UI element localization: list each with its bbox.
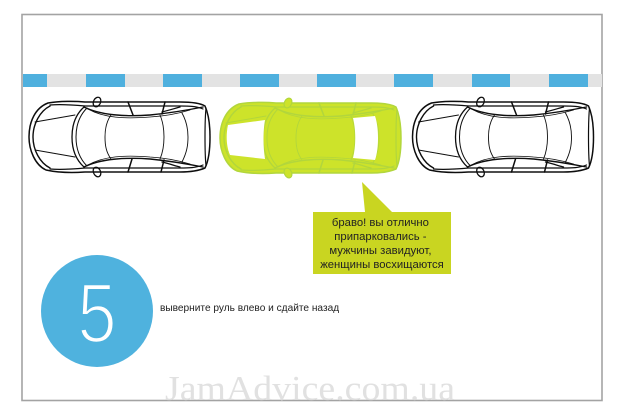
right parked car: [412, 96, 594, 178]
callout: женщины восхищаются: [320, 259, 444, 271]
left parked car: [29, 96, 210, 178]
instruction text: выверните руль влево и сдайте назад: [160, 303, 339, 314]
green car parked between: [220, 97, 401, 179]
hood highlight: [227, 120, 265, 159]
watermark: JamAdvice.com.ua: [165, 369, 455, 408]
step number badge: [41, 255, 153, 367]
step number badge: 5: [77, 267, 117, 360]
callout: мужчины завидуют,: [329, 245, 431, 257]
road marking stripe: [23, 74, 602, 87]
callout: [313, 182, 451, 274]
callout: браво! вы отлично: [332, 217, 429, 229]
rear window highlight: [353, 116, 378, 160]
callout: припарковались -: [334, 231, 427, 243]
